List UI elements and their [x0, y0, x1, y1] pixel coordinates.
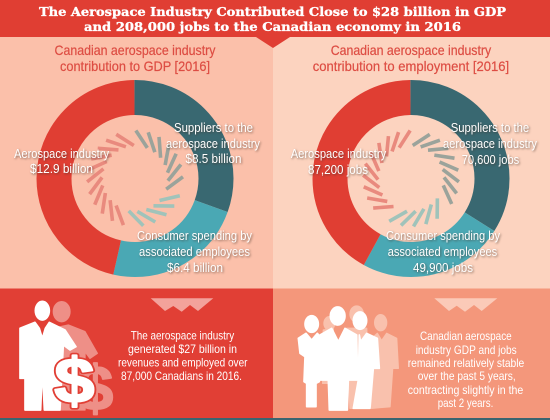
icon: chevron marker left	[151, 298, 213, 312]
text: revenue note: revenues and employed over	[118, 356, 248, 370]
icon: businessmen with dollar signs: $	[54, 346, 94, 416]
label: suppliers GDP: Suppliers to the	[174, 121, 253, 135]
text: stability note: past 2 years.	[438, 396, 493, 410]
donut chart: GDP	[14, 98, 261, 275]
text: stability note: contracting slightly in the	[408, 383, 524, 397]
label: suppliers employment	[443, 121, 538, 167]
text: stability note: Canadian aerospace	[420, 329, 512, 343]
label: consumer GDP	[137, 229, 253, 275]
label: consumer employment: 49,900 jobs	[413, 261, 473, 275]
title banner: and 208,000 jobs to the Canadian economy in 2016	[84, 19, 461, 34]
label: consumer employment	[386, 229, 501, 275]
panel: left background	[0, 0, 273, 420]
text: revenue note: generated $27 billion in	[128, 342, 237, 356]
text: revenue note	[118, 328, 248, 383]
label: aerospace GDP: $12.9 billion	[30, 162, 93, 176]
label: consumer GDP: $6.4 billion	[167, 261, 223, 275]
label: consumer employment: associated employees	[388, 245, 497, 259]
icon: group of people	[298, 306, 398, 410]
panel: right background	[273, 0, 550, 420]
label: suppliers employment: Suppliers to the	[451, 121, 529, 135]
text: stability note: industry GDP and jobs	[416, 343, 517, 357]
heading: employment: contribution to employment [2016]	[313, 58, 509, 74]
label: aerospace employment: Aerospace industry	[291, 147, 387, 161]
label: aerospace GDP	[14, 147, 110, 176]
label: aerospace employment: 87,200 jobs	[308, 163, 368, 177]
heading: employment: Canadian aerospace industry	[331, 42, 491, 58]
heading: GDP: contribution to GDP [2016]	[60, 58, 210, 74]
heading: GDP	[54, 42, 216, 74]
label: suppliers employment: 70,600 jobs	[462, 153, 519, 167]
panel: stability callout	[273, 288, 550, 418]
text: stability note: over the past 5 years,	[418, 369, 516, 383]
panel: revenue callout	[0, 288, 273, 420]
label: aerospace GDP: Aerospace industry	[14, 147, 110, 161]
label: consumer employment: Consumer spending by	[386, 229, 501, 243]
label: consumer GDP: Consumer spending by	[137, 229, 253, 243]
label: aerospace employment	[291, 147, 387, 177]
icon: businessmen with dollar signs: $	[54, 346, 94, 416]
heading: GDP: Canadian aerospace industry	[54, 42, 216, 58]
title banner	[0, 0, 550, 48]
text: revenue note: The aerospace industry	[131, 328, 234, 342]
icon: chevron marker right	[434, 298, 497, 312]
text: stability note: remained relatively stable	[408, 356, 525, 370]
text: revenue note: 87,000 Canadians in 2016.	[121, 369, 242, 383]
label: suppliers GDP	[166, 121, 261, 166]
text: stability note	[408, 329, 525, 410]
title banner: The Aerospace Industry Contributed Close to $28 billion in GDP	[39, 4, 507, 19]
label: suppliers GDP: $8.5 billion	[186, 152, 242, 166]
label: suppliers GDP: aerospace industry	[166, 137, 261, 151]
icon: businessmen with dollar signs	[20, 301, 113, 420]
donut chart: employment	[291, 98, 538, 275]
label: suppliers employment: aerospace industry	[443, 137, 538, 151]
heading: employment	[313, 42, 509, 74]
label: consumer GDP: associated employees	[139, 245, 250, 259]
